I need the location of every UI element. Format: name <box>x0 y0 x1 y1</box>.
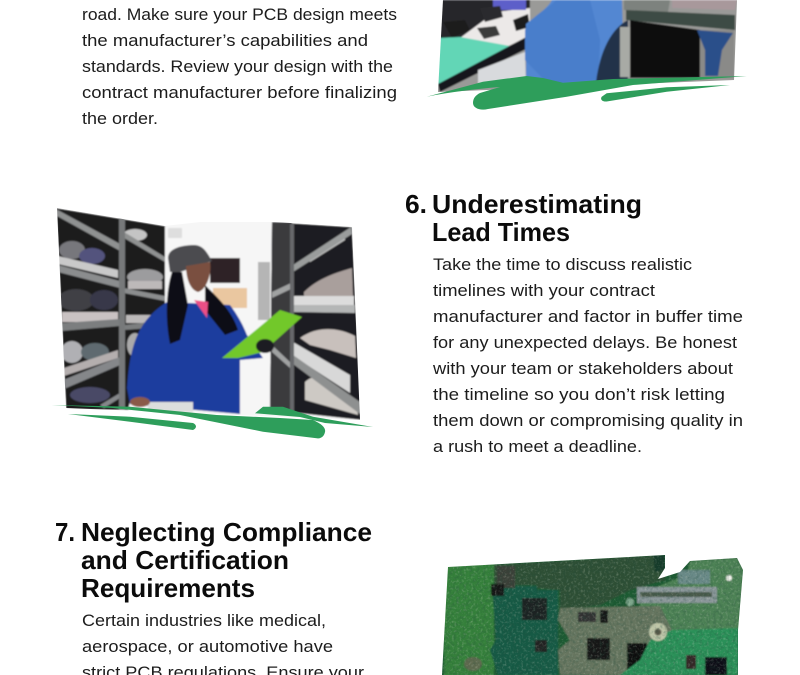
heading: 6. Underestimating Lead Times: 6. <box>405 189 427 219</box>
text block: section 6 body: Take the time to discuss realistic <box>433 255 693 274</box>
text block: section 5 body: the manufacturer’s capabilities and <box>82 31 368 50</box>
text block: section 6 body: with your team or stakeholders about <box>432 359 733 378</box>
text block: section 5 body: the order. <box>82 109 158 128</box>
worker <box>127 302 263 414</box>
heading: 7. Neglecting Compliance and Certification Requirements: 7. <box>55 517 75 547</box>
heading: 7. Neglecting Compliance and Certification Requirements: and Certification <box>81 545 289 575</box>
photo: printed circuit board <box>440 550 745 675</box>
text block: section 6 body: them down or compromising quality in <box>433 411 743 430</box>
left rack contents <box>59 241 85 259</box>
photo: worker with clipboard in parts storeroom <box>50 205 373 438</box>
text block: section 7 body: Certain industries like medical, <box>82 611 326 630</box>
text block: section 6 body: a rush to meet a deadline. <box>433 437 642 456</box>
heading: 6. Underestimating Lead Times: Underestimating <box>432 189 642 219</box>
heading: 6. Underestimating Lead Times <box>405 189 642 247</box>
text block: section 5 body: standards. Review your design with the <box>82 57 393 76</box>
text block: section 5 body <box>82 5 397 128</box>
text block: section 6 body: timelines with your contract <box>433 281 655 300</box>
text block: section 7 body <box>82 611 364 675</box>
text block: section 5 body: contract manufacturer before finalizing <box>82 83 397 102</box>
heading: 7. Neglecting Compliance and Certification Requirements: Neglecting Compliance <box>81 517 372 547</box>
right rack shelves <box>293 227 352 272</box>
heading: 6. Underestimating Lead Times: Lead Times <box>432 217 570 247</box>
heading: 7. Neglecting Compliance and Certification Requirements: Requirements <box>81 573 255 603</box>
text block: section 6 body: for any unexpected delays. Be honest <box>433 333 737 352</box>
text block: section 6 body <box>432 255 743 456</box>
right rack contents <box>270 222 292 412</box>
left rack shelves <box>56 209 122 252</box>
text block: section 7 body: aerospace, or automotive have <box>82 637 333 656</box>
photo: technician at assembly workbench <box>427 0 747 110</box>
wall items <box>210 258 240 283</box>
swoosh: green brush stroke <box>52 405 325 438</box>
text block: section 6 body: manufacturer and factor in buffer time <box>433 307 743 326</box>
text block: section 5 body: road. Make sure your PCB design meets <box>82 5 397 24</box>
swoosh: green brush stroke <box>427 76 747 110</box>
text block: section 6 body: the timeline so you don’t risk letting <box>433 385 725 404</box>
heading: 7. Neglecting Compliance and Certification Requirements <box>55 517 372 603</box>
